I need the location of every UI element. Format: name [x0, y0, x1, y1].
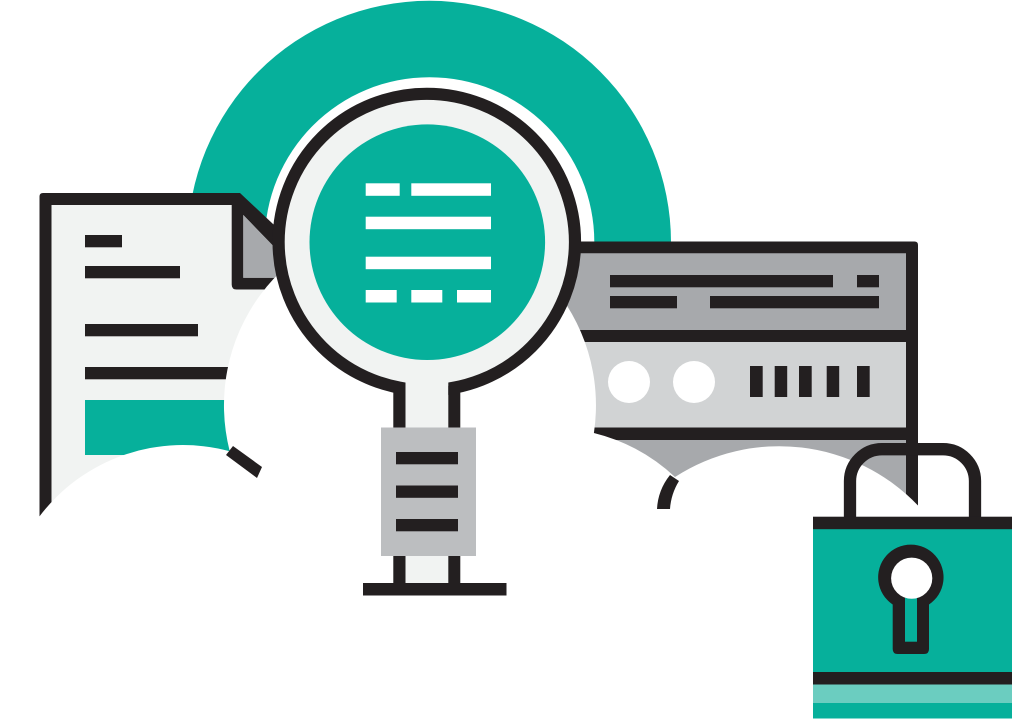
- lens teal centre: [310, 124, 545, 360]
- light teal stripe: [813, 684, 1012, 703]
- cloud outline dash right: [657, 475, 679, 509]
- handle sides: [393, 382, 460, 590]
- lens ring: [279, 94, 575, 390]
- keyhole outline: [878, 545, 944, 654]
- top section lines: [610, 275, 879, 308]
- document sheet: [45, 199, 280, 520]
- panel: document: [40, 193, 281, 520]
- white cloud: [39, 219, 918, 719]
- magnifying glass: [279, 94, 575, 596]
- indicator lights: [608, 361, 715, 403]
- server frame: [550, 242, 918, 510]
- teal half ring behind magnifier: [188, 1, 671, 407]
- cloud outline dash left: [226, 446, 262, 478]
- bottom section: [550, 433, 912, 510]
- lens text lines: [366, 183, 491, 302]
- keyhole opening: [891, 558, 932, 599]
- keyhole slot: [905, 595, 917, 642]
- teal block: [85, 400, 235, 455]
- shackle: [850, 449, 975, 517]
- body bottom band: [813, 672, 1012, 684]
- grip: [381, 428, 476, 556]
- vent bars: [750, 366, 870, 397]
- keyhole: [878, 545, 944, 654]
- folded corner: [243, 215, 281, 278]
- grip lines: [396, 452, 458, 531]
- document outline: [40, 193, 281, 520]
- handle neck: [406, 375, 448, 585]
- lock body: [813, 517, 1012, 718]
- text lines: [85, 235, 235, 379]
- panel: server: [550, 242, 918, 510]
- top section: [550, 247, 912, 336]
- middle section: [550, 336, 912, 433]
- base bar: [363, 583, 506, 596]
- padlock: [813, 449, 1012, 718]
- body top band: [813, 517, 1012, 529]
